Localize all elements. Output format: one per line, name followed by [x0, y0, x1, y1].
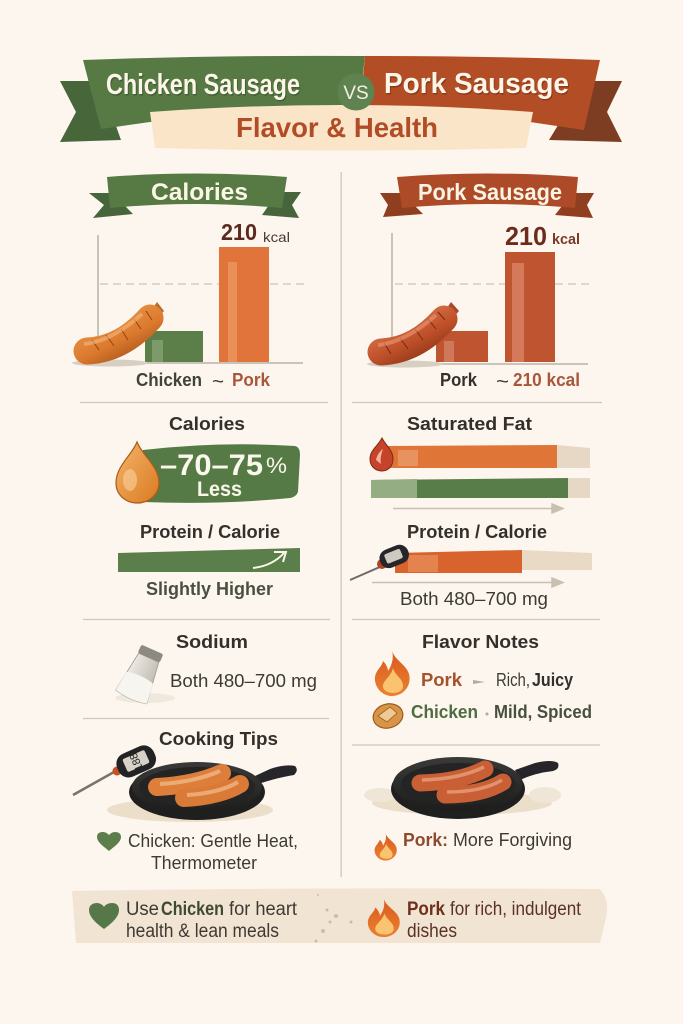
heading protein: Protein / Calorie	[407, 521, 547, 542]
less: Less	[197, 478, 242, 501]
pill	[143, 444, 300, 503]
heading protein: Protein / Calorie	[140, 521, 280, 542]
axis label: pork: Pork	[440, 370, 478, 390]
icon: chicken medallion	[370, 701, 406, 731]
panel: sodium	[115, 631, 317, 706]
icon: thermometer	[350, 542, 412, 580]
icon: heart	[97, 832, 121, 851]
arrow	[393, 504, 563, 513]
sausage two	[184, 782, 240, 798]
icon: flame	[375, 650, 410, 696]
heading: Saturated Fat	[407, 413, 532, 434]
bottom recommendation band	[72, 888, 607, 943]
icon: flame	[375, 833, 397, 861]
red banner half	[358, 56, 600, 130]
ribbon heading	[89, 174, 301, 218]
pork advice line one: for rich, indulgent	[450, 899, 582, 920]
small arrow	[473, 680, 485, 684]
pork advice line two: dishes	[407, 921, 457, 942]
sausage two	[445, 780, 503, 795]
reference line	[395, 283, 592, 285]
left ribbon tail	[60, 81, 121, 142]
chicken advice line one: for heart	[229, 899, 298, 920]
panel: calories chart, pork	[367, 174, 594, 393]
reference line	[100, 283, 308, 285]
title shadow right: Pork Sausage	[385, 70, 570, 102]
icon: pork sausage	[367, 302, 459, 368]
value: Both 480–700 mg	[170, 671, 317, 691]
percent sign: %	[266, 453, 287, 478]
sausage one	[420, 767, 485, 783]
green banner half	[83, 56, 365, 129]
panel: cooking tips pork	[364, 757, 572, 861]
axes	[98, 235, 303, 363]
heading: Cooking Tips	[159, 728, 278, 749]
chicken advice line two: health & lean meals	[126, 921, 279, 942]
unit kcal: kcal	[552, 231, 580, 248]
icon: salt shaker	[115, 643, 175, 706]
panel: calories less	[116, 413, 300, 599]
axes	[392, 233, 588, 364]
arrow	[253, 552, 286, 568]
icon: frying pan	[391, 757, 558, 819]
band	[72, 888, 607, 943]
rich: Rich,	[496, 670, 530, 690]
value 210: 210	[505, 221, 547, 251]
column divider	[340, 172, 342, 877]
caption: Both 480–700 mg	[400, 589, 548, 609]
dividers: row three	[83, 718, 600, 745]
axis label: pork: Pork	[232, 370, 271, 390]
ribbon heading: Calories	[151, 179, 248, 206]
icon: chicken sausage	[72, 302, 164, 366]
arrow	[372, 578, 563, 587]
bar protein	[395, 550, 592, 573]
panel: saturated fat	[350, 413, 592, 609]
title text right: Pork Sausage	[384, 68, 569, 100]
unit kcal: kcal	[263, 229, 290, 245]
bar chicken	[371, 478, 590, 498]
sausage one	[157, 771, 222, 787]
icon: flame	[368, 898, 400, 937]
heading: Sodium	[176, 631, 248, 652]
tip line two: Thermometer	[151, 853, 257, 873]
icon: thermometer	[73, 742, 160, 795]
vs badge	[338, 74, 374, 110]
heading: Flavor Notes	[422, 631, 539, 652]
panel: flavor notes	[370, 631, 592, 731]
heading: Calories	[169, 413, 245, 434]
chicken advice line one: Chicken	[161, 899, 224, 920]
percent figure: –70–75	[160, 449, 263, 482]
bar: pork high	[505, 252, 555, 362]
pan shadow	[107, 798, 273, 822]
panel: cooking tips chicken	[73, 728, 298, 873]
title text left: Chicken Sausage	[106, 69, 300, 101]
axis label: value: 210 kcal	[513, 370, 580, 390]
tip line one: Chicken: Gentle Heat,	[128, 831, 298, 851]
pork advice line one	[407, 899, 582, 920]
tilde: ~	[212, 371, 224, 393]
juicy: Juicy	[532, 669, 574, 690]
ribbon heading: Pork Sausage	[418, 179, 562, 205]
chicken advice line one: Use	[126, 899, 159, 920]
icon: thermometer: 188	[128, 751, 146, 772]
bar: pork	[219, 247, 269, 362]
axis label: chicken: Chicken	[136, 370, 202, 390]
tip text: More Forgiving	[453, 830, 572, 850]
chicken label: Chicken	[411, 701, 478, 722]
tilde: ~	[496, 371, 509, 393]
value 210: 210	[221, 219, 257, 245]
bar pork	[388, 445, 590, 468]
icon: oil drop	[116, 442, 159, 503]
title banner	[60, 56, 622, 151]
right ribbon tail	[549, 81, 622, 142]
dividers: row two	[83, 618, 600, 620]
pan shadow	[364, 787, 561, 815]
pork label: Pork	[421, 669, 463, 690]
ribbon heading	[380, 174, 594, 218]
chicken advice line one	[126, 899, 298, 920]
protein bar	[118, 548, 300, 572]
icon: frying pan	[129, 762, 297, 820]
dividers: row one	[80, 402, 602, 404]
subtitle plate	[150, 105, 533, 150]
panel: calories chart, chicken	[72, 174, 308, 393]
bar: pork	[436, 331, 488, 362]
icon: fat drop	[370, 438, 393, 471]
vs label: VS	[343, 83, 369, 104]
icon: heart	[89, 903, 119, 929]
decorative specks	[314, 894, 352, 942]
tip label: Pork:	[403, 829, 448, 850]
mild spiced: Mild, Spiced	[494, 702, 592, 722]
subtitle: Flavor & Health	[236, 112, 438, 143]
caption: Slightly Higher	[146, 578, 273, 599]
dot	[486, 712, 488, 716]
bar: chicken	[145, 331, 203, 362]
title shadow left: Chicken Sausage	[107, 70, 301, 102]
pork advice line one: Pork	[407, 899, 445, 920]
